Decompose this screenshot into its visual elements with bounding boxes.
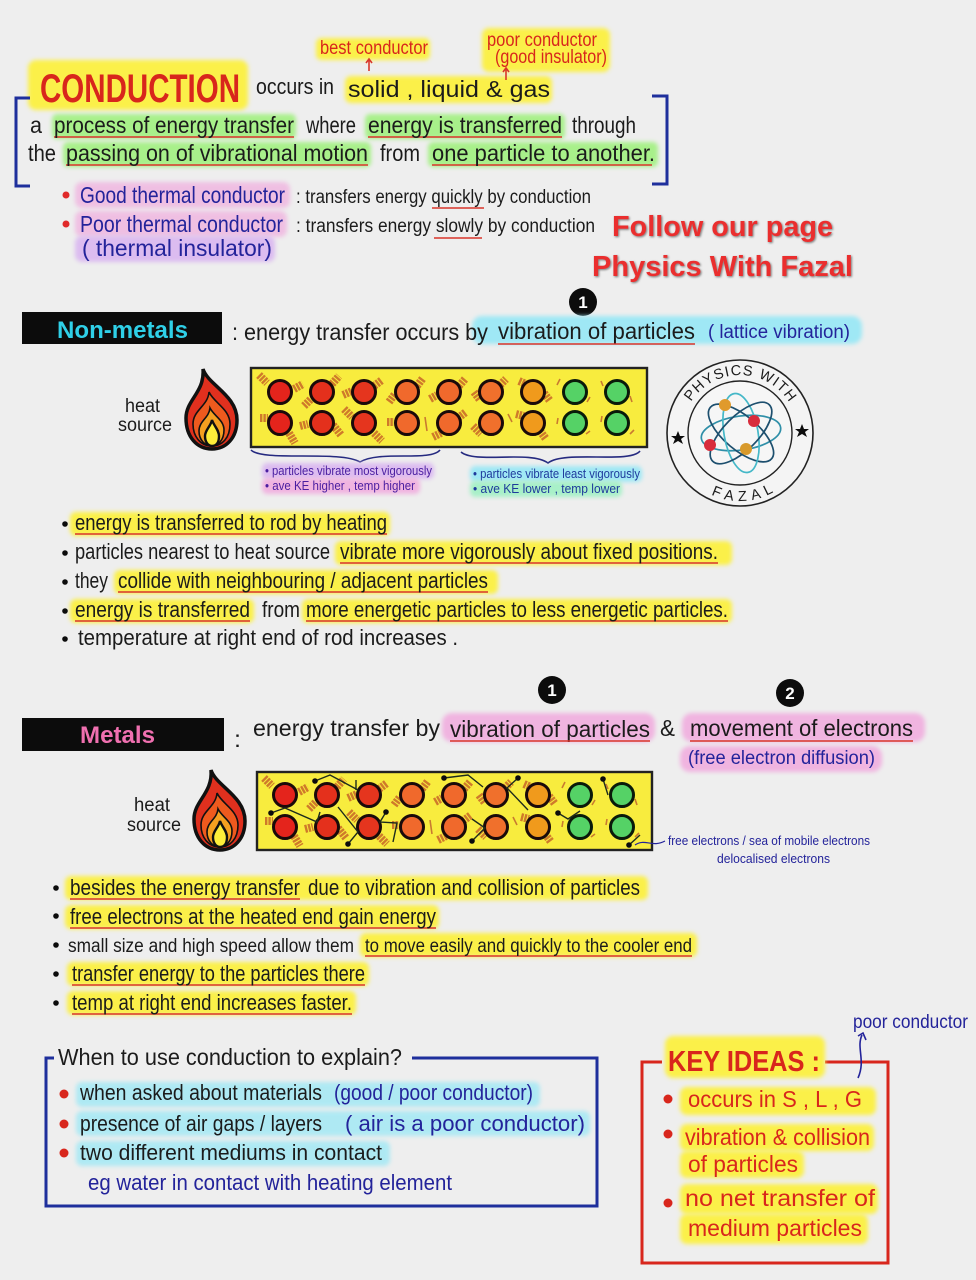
- panel: when to use conduction: eg water in contact with heating element: [88, 1170, 452, 1195]
- heading: metals energy transfer: movement of electrons: [690, 715, 913, 741]
- title: Conduction: [28, 60, 248, 111]
- panel: when to use conduction: ( air is a poor conductor): [345, 1111, 585, 1136]
- heading: non-metals energy transfer: vibration of particles: [498, 318, 695, 344]
- badge 1 non-metals: [569, 288, 597, 316]
- poor thermal conductor row: ( thermal insulator): [82, 235, 272, 261]
- annotation: best conductor: best conductor: [320, 38, 429, 59]
- badge 1 non-metals: 1: [578, 293, 588, 312]
- brace and note: hot end: [251, 450, 440, 494]
- label: Metals: Metals: [80, 722, 155, 749]
- logo: Physics With Fazal: PHYSICS WITH: [684, 365, 797, 402]
- bullet list: non-metals: they: [75, 568, 108, 593]
- good thermal conductor row: Good thermal conductor: [80, 182, 285, 208]
- title: Conduction: CONDUCTION: [40, 67, 240, 111]
- panel: when to use conduction: [46, 1044, 597, 1206]
- good thermal conductor row: : transfers energy quickly by conduction: [296, 187, 591, 208]
- panel: when to use conduction: When to use conduction to explain?: [58, 1044, 402, 1070]
- subtitle: occurs in solid, liquid and gas: solid , liquid & gas: [348, 76, 550, 102]
- panel: key ideas: medium particles: [688, 1215, 862, 1241]
- bullet list: metals: to move easily and quickly to the cooler end: [365, 936, 692, 957]
- heading: metals energy transfer: vibration of particles: [450, 716, 650, 742]
- brace and note: hot end: • particles vibrate most vigorously: [265, 464, 433, 478]
- poor thermal conductor row: [62, 211, 595, 262]
- bullet list: non-metals: from: [262, 597, 300, 622]
- bullet list: non-metals: energy is transferred: [75, 597, 250, 622]
- promo text: Follow our page: [592, 211, 853, 283]
- panel: when to use conduction: (good / poor conductor): [334, 1080, 533, 1105]
- bullet list: metals: besides the energy transfer: [70, 875, 300, 900]
- heat source non-metals: source: [118, 415, 172, 436]
- bullet list: non-metals: energy is transferred to rod by heating: [75, 510, 387, 535]
- definition block in brackets: the: [28, 140, 56, 166]
- panel: when to use conduction: when asked about materials: [79, 1080, 322, 1105]
- panel: when to use conduction: presence of air gaps / layers: [80, 1111, 322, 1136]
- definition block in brackets: a: [30, 112, 42, 138]
- panel: key ideas: of particles: [688, 1151, 798, 1177]
- bullet list: non-metals: temperature at right end of rod increases .: [78, 625, 458, 650]
- bullet list: metals: transfer energy to the particles there: [72, 961, 365, 986]
- bullet list: metals: small size and high speed allow them: [68, 936, 354, 957]
- definition block in brackets: from: [380, 140, 420, 166]
- subtitle: occurs in solid, liquid and gas: [256, 74, 552, 103]
- bullet list: metals: free electrons at the heated end gain energy: [70, 904, 436, 929]
- heading: non-metals energy transfer: ( lattice vibration): [708, 322, 850, 343]
- heat source metals: heat: [134, 795, 171, 816]
- bullet list: non-metals: [62, 510, 732, 650]
- label: Non-metals: Non-metals: [57, 317, 188, 344]
- badges 1 and 2 metals: 2: [785, 684, 795, 703]
- poor thermal conductor row: : transfers energy slowly by conduction: [296, 216, 595, 237]
- annotation: poor conductor, good insulator: (good insulator): [495, 47, 607, 68]
- good thermal conductor row: [62, 182, 591, 208]
- panel: key ideas: KEY IDEAS :: [668, 1046, 820, 1078]
- panel: key ideas: [642, 1036, 888, 1263]
- heading: non-metals energy transfer: : energy transfer occurs by: [232, 319, 488, 345]
- brace and note: cool end: [461, 451, 642, 497]
- bullet list: metals: due to vibration and collision of particles: [308, 875, 640, 900]
- annotation: poor conductor, good insulator: [482, 28, 610, 80]
- heading: metals energy transfer: &: [660, 715, 675, 741]
- heading: metals energy transfer: (free electron diffusion): [688, 748, 875, 769]
- note: free electrons: delocalised electrons: [717, 851, 830, 866]
- heat source metals: source: [127, 815, 181, 836]
- heat source non-metals: heat: [125, 396, 161, 417]
- panel: key ideas: no net transfer of: [685, 1185, 876, 1211]
- annotation: best conductor: [316, 38, 430, 71]
- label: Metals: [22, 718, 224, 751]
- logo: Physics With Fazal: [666, 359, 814, 507]
- bullet list: non-metals: collide with neighbouring / adjacent particles: [118, 568, 488, 593]
- brace and note: cool end: • ave KE lower , temp lower: [473, 482, 620, 496]
- heading: metals energy transfer: [234, 713, 925, 772]
- label: Non-metals: [22, 312, 222, 344]
- definition block in brackets: process of energy transfer: [54, 112, 294, 138]
- definition block in brackets: one particle to another.: [432, 140, 655, 166]
- bullet list: non-metals: more energetic particles to less energetic particles.: [306, 597, 728, 622]
- annotation: poor conductor arrow: poor conductor: [853, 1012, 969, 1033]
- bullet list: metals: [53, 875, 697, 1015]
- logo: Physics With Fazal: FAZAL: [712, 486, 774, 502]
- subtitle: occurs in solid, liquid and gas: occurs in: [256, 74, 334, 99]
- bullet list: non-metals: particles nearest to heat source: [75, 539, 330, 564]
- definition block in brackets: energy is transferred: [368, 112, 562, 138]
- badges 1 and 2 metals: [538, 676, 804, 707]
- definition block in brackets: where: [305, 112, 356, 138]
- heading: metals energy transfer: energy transfer by: [253, 715, 440, 741]
- bullet list: metals: temp at right end increases faster.: [72, 990, 352, 1015]
- definition block in brackets: [16, 96, 667, 186]
- brace and note: cool end: • particles vibrate least vigorously: [473, 467, 641, 481]
- rod: non-metals lattice vibration: [251, 368, 647, 447]
- note: free electrons: free electrons / sea of mobile electrons: [668, 833, 870, 848]
- definition block in brackets: passing on of vibrational motion: [66, 140, 368, 166]
- rod: metals with free electrons: [257, 772, 652, 850]
- definition block in brackets: through: [572, 112, 636, 138]
- promo text: Follow our page: Follow our page: [612, 211, 833, 243]
- panel: when to use conduction: two different mediums in contact: [80, 1140, 382, 1165]
- badges 1 and 2 metals: 1: [547, 681, 557, 700]
- heat source metals: [127, 770, 245, 850]
- poor thermal conductor row: Poor thermal conductor: [80, 211, 283, 237]
- annotation: poor conductor, good insulator: poor conductor: [487, 30, 598, 51]
- panel: key ideas: occurs in S , L , G: [688, 1086, 862, 1112]
- heat source non-metals: [118, 369, 237, 449]
- panel: key ideas: vibration & collision: [685, 1124, 870, 1150]
- heading: non-metals energy transfer: [232, 316, 862, 345]
- promo text: Follow our page: Physics With Fazal: [592, 251, 853, 283]
- bullet list: non-metals: vibrate more vigorously about fixed positions.: [340, 539, 718, 564]
- annotation: poor conductor arrow: [853, 1012, 969, 1078]
- note: free electrons: [635, 833, 870, 866]
- brace and note: hot end: • ave KE higher , temp higher: [265, 479, 415, 493]
- heading: metals energy transfer: :: [234, 726, 241, 752]
